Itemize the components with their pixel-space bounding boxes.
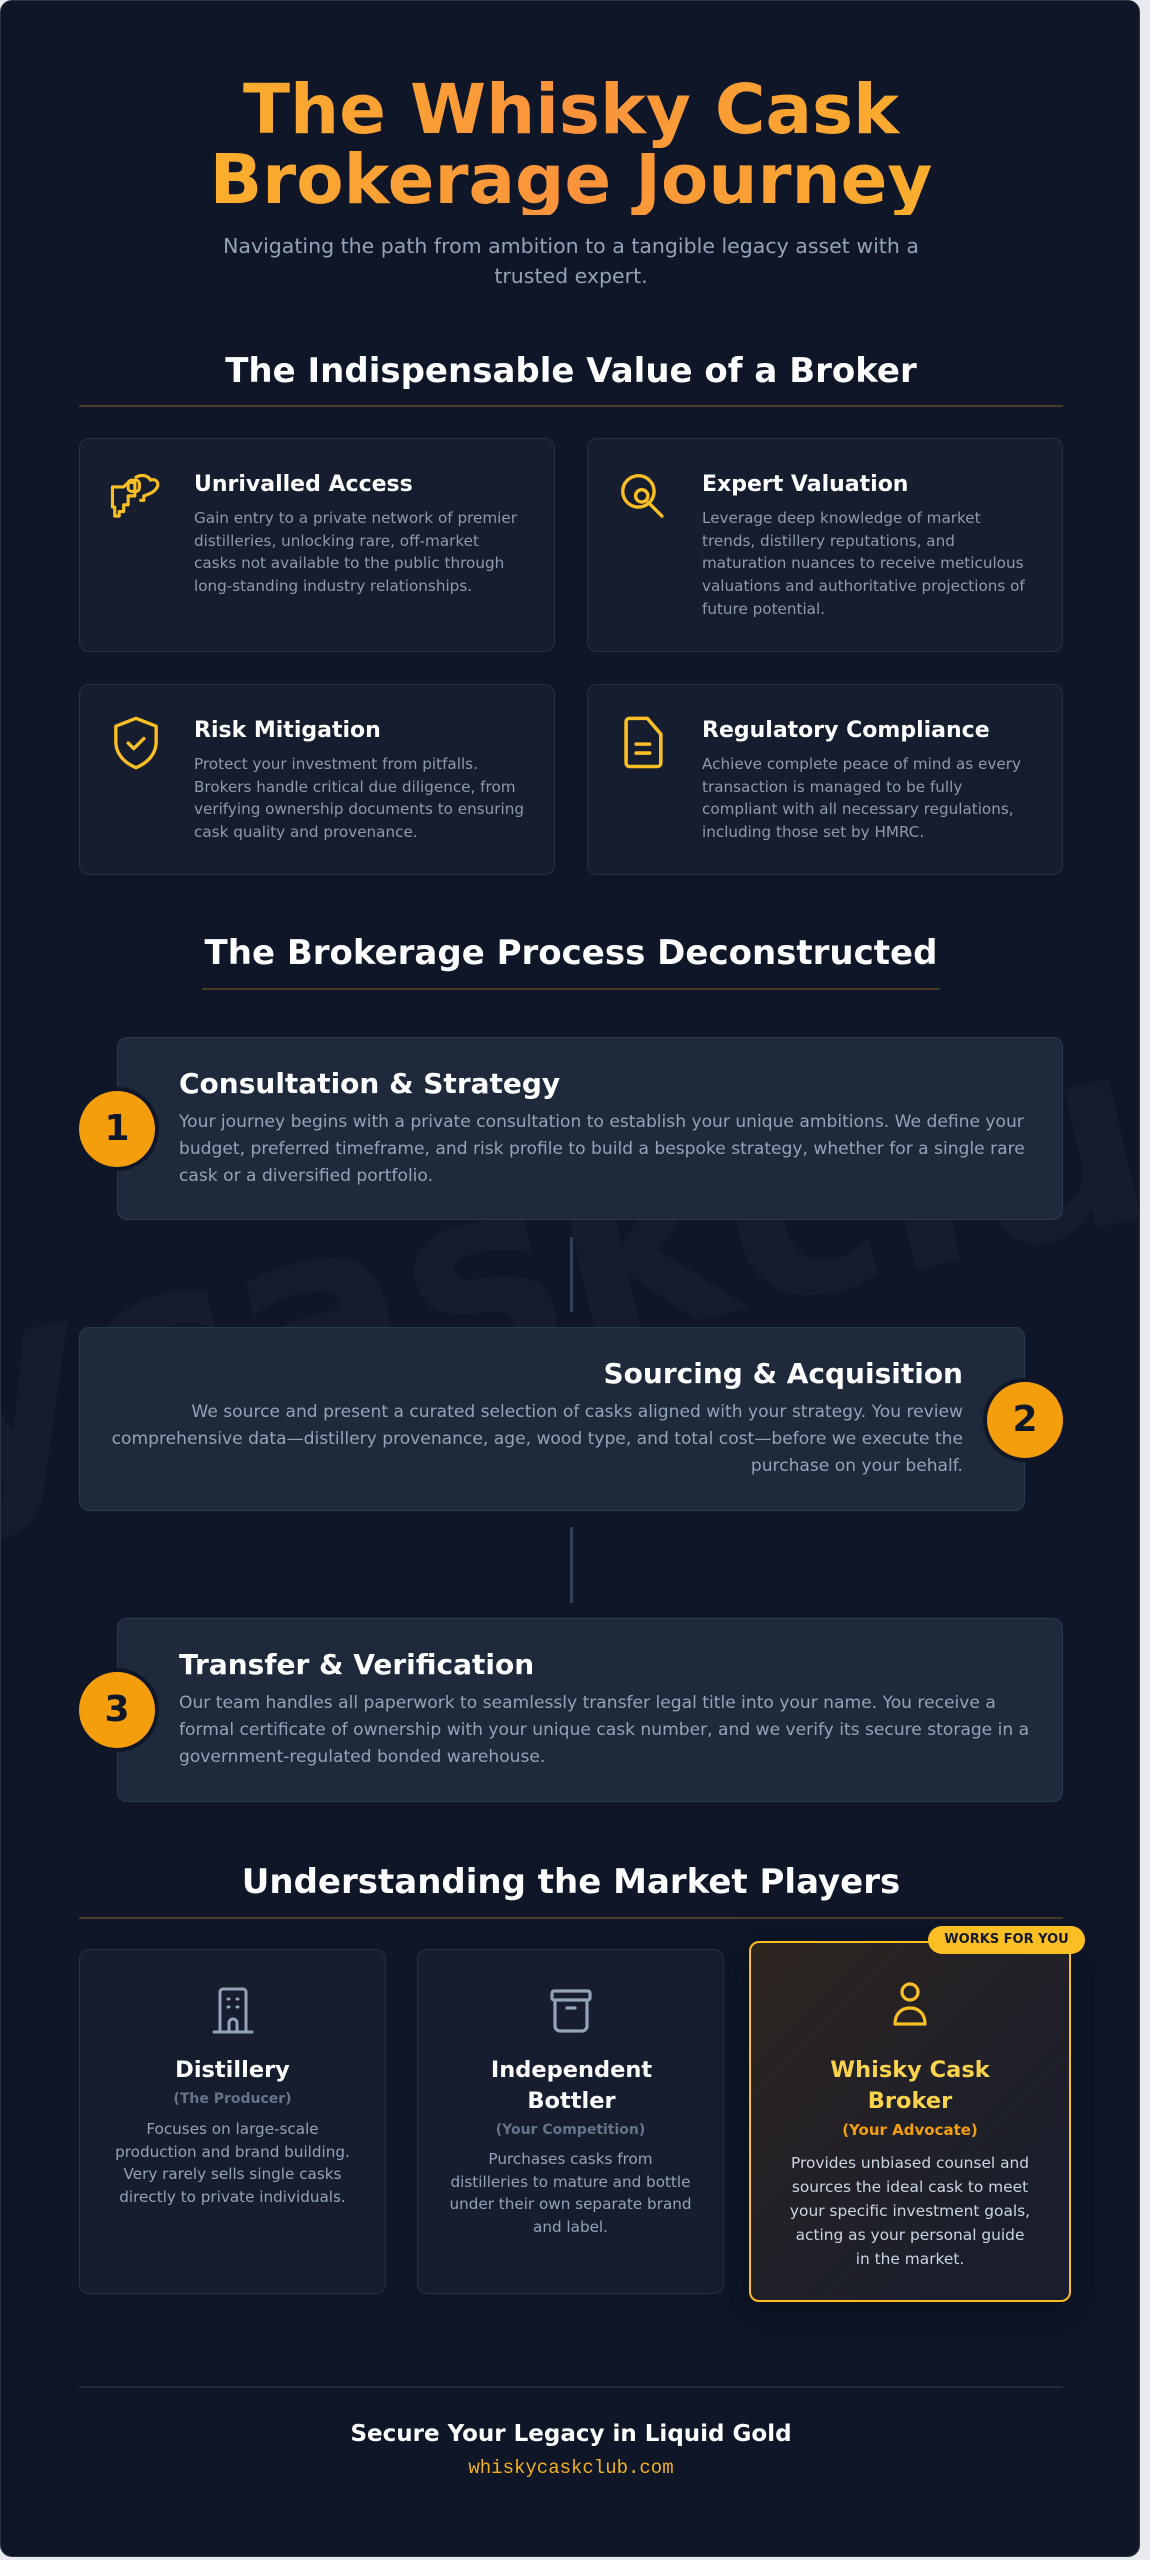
text: Our team handles all paperwork to seamlessly transfer legal title into your name. You receive a formal certificate of ownership with your unique cask number, and we verify its secure storage in a government-regulated bonded warehouse. [179, 1693, 1029, 1767]
footer url: whiskycaskclub.com [468, 2457, 674, 2479]
heading: Expert Valuation [702, 472, 908, 497]
step 1 card [117, 1037, 1063, 1220]
heading: Consultation & Strategy [179, 1067, 560, 1100]
text: Purchases casks from distilleries to mature and bottle under their own separate brand and label. [449, 2150, 692, 2236]
text: Gain entry to a private network of premier distilleries, unlocking rare, off-market casks not available to the public through long-standing industry relationships. [194, 509, 517, 595]
step number 2 [987, 1382, 1063, 1458]
subtitle: Navigating the path from ambition to a tangible legacy asset with a trusted expert. [223, 234, 919, 288]
badge: works for you: WORKS FOR YOU [944, 1932, 1069, 1947]
panel: distillery [79, 1949, 386, 2294]
icon: box [550, 1989, 592, 2033]
text: Protect your investment from pitfalls. Brokers handle critical due diligence, from verifying ownership documents to ensuring cask quality and provenance. [194, 755, 524, 841]
heading [830, 2057, 990, 2114]
icon: shield [114, 716, 158, 770]
panel: expert valuation [587, 438, 1063, 652]
icon: handshake [110, 474, 160, 518]
heading: value of a broker: The Indispensable Value of a Broker [225, 351, 917, 391]
heading: Unrivalled Access [194, 472, 413, 497]
connector 2 [570, 1527, 573, 1603]
panel: independent bottler [417, 1949, 724, 2294]
title [1, 75, 1141, 215]
footer tagline: Secure Your Legacy in Liquid Gold [350, 2421, 792, 2447]
icon: document [624, 716, 663, 768]
role: (Your Advocate) [842, 2121, 978, 2139]
step number 3: 3 [104, 1689, 130, 1730]
text: Focuses on large-scale production and brand building. Very rarely sells single casks directly to private individuals. [115, 2120, 350, 2206]
step number 2: 2 [1012, 1399, 1038, 1440]
text: Achieve complete peace of mind as every transaction is managed to be fully compliant with all necessary regulations, including those set by HMRC. [702, 755, 1021, 841]
heading: Whisky Cask [830, 2057, 990, 2083]
role: (The Producer) [173, 2091, 292, 2107]
step 2 card [79, 1327, 1025, 1511]
text: Provides unbiased counsel and sources the ideal cask to meet your specific investment goals, acting as your personal guide in the market. [790, 2154, 1030, 2268]
title: Brokerage Journey [210, 140, 932, 220]
heading: market players: Understanding the Market Players [242, 1862, 900, 1902]
icon: person [893, 1982, 927, 2026]
heading: Transfer & Verification [179, 1648, 534, 1681]
heading: Regulatory Compliance [702, 718, 990, 743]
role: (Your Competition) [496, 2122, 645, 2138]
heading: Sourcing & Acquisition [604, 1357, 963, 1390]
heading: Distillery [175, 2057, 290, 2083]
connector 1 [570, 1237, 573, 1312]
panel: whisky cask broker (highlighted) [749, 1941, 1071, 2302]
badge: works for you [928, 1926, 1085, 1954]
icon: building [212, 1988, 254, 2034]
panel: regulatory compliance [587, 684, 1063, 875]
icon: magnifier [621, 474, 664, 518]
heading: Independent Bottler [491, 2057, 652, 2114]
panel: risk mitigation [79, 684, 555, 875]
heading: Risk Mitigation [194, 718, 381, 743]
step number 1 [79, 1091, 155, 1167]
heading: process: The Brokerage Process Deconstructed [205, 933, 937, 973]
step 3 card [117, 1618, 1063, 1802]
step number 1: 1 [104, 1108, 130, 1149]
title: The Whisky Cask [243, 70, 899, 150]
step number 3 [79, 1672, 155, 1748]
text: Leverage deep knowledge of market trends, distillery reputations, and maturation nuances to receive meticulous valuations and authoritative projections of future potential. [702, 509, 1025, 618]
text: Your journey begins with a private consultation to establish your unique ambitions. We define your budget, preferred timeframe, and risk profile to build a bespoke strategy, whether for a single rare cask or a diversified portfolio. [179, 1112, 1025, 1186]
text: We source and present a curated selection of casks aligned with your strategy. You review comprehensive data—distillery provenance, age, wood type, and total cost—before we execute the purchase on your behalf. [112, 1402, 963, 1476]
panel: unrivalled access [79, 438, 555, 652]
heading: Broker [868, 2088, 952, 2114]
